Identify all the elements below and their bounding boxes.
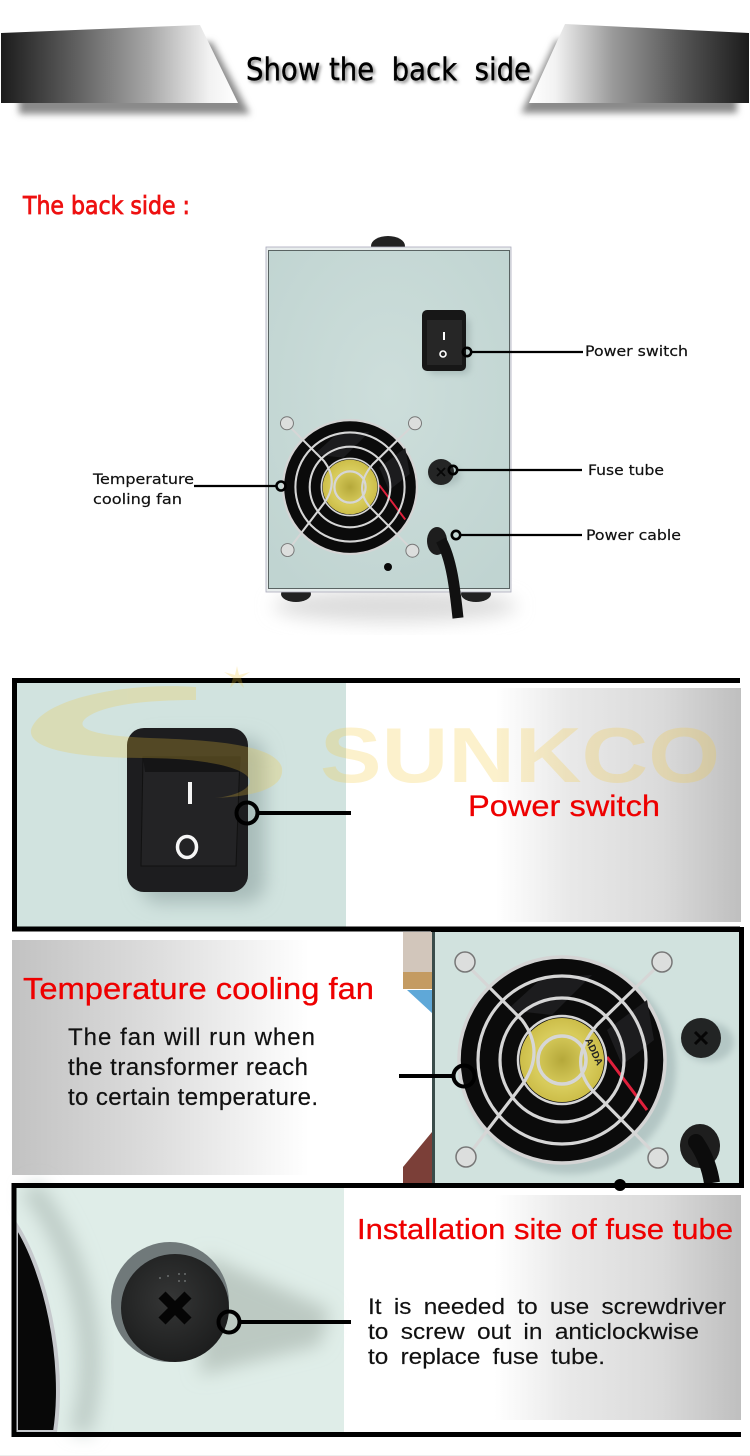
- page title: Show the back side: [246, 52, 531, 88]
- panel: power switch: [14, 666, 741, 929]
- fuse knob: [111, 1242, 229, 1362]
- gradient background: [12, 940, 403, 1175]
- callout pointer: [218, 1312, 351, 1332]
- callout: power cable: [452, 528, 681, 544]
- frame: [14, 1186, 744, 1434]
- heading: installation site of fuse tube: Installation site of fuse tube: [357, 1214, 733, 1246]
- power cable: [427, 527, 458, 618]
- fan photo: [432, 932, 739, 1191]
- fan label: ADDA: [582, 1037, 604, 1067]
- frame: [14, 680, 740, 929]
- vent hole: [614, 1179, 626, 1191]
- heading: power switch: Power switch: [468, 790, 660, 823]
- description text: It is needed to use screwdriver: [368, 1294, 726, 1319]
- callout: power cable: Power cable: [586, 528, 681, 544]
- description text: [368, 1294, 726, 1369]
- description text: The fan will run when: [68, 1024, 315, 1051]
- fuse holder: [681, 1018, 734, 1062]
- panel: fuse tube: [14, 1186, 744, 1434]
- panel: temperature cooling fan: [12, 930, 742, 1191]
- background photo strip: [403, 932, 432, 1183]
- small cooling fan: [280, 417, 422, 557]
- frame: [431, 930, 742, 1186]
- callout: power switch: Power switch: [585, 344, 688, 360]
- heading: temperature cooling fan: Temperature cooling fan: [23, 971, 374, 1006]
- gradient background: [346, 688, 741, 922]
- description text: the transformer reach: [68, 1054, 308, 1081]
- watermark: SUNKCO: [320, 711, 720, 799]
- callout: temperature cooling fan: Temperature: [92, 472, 194, 488]
- description text: to screw out in anticlockwise: [368, 1319, 699, 1344]
- watermark: [31, 666, 720, 799]
- section heading: the back side: The back side :: [22, 191, 190, 220]
- callout: fuse tube: [449, 463, 664, 479]
- right header ribbon: [521, 24, 749, 113]
- header banner: [1, 24, 749, 114]
- callout pointer: [236, 802, 351, 824]
- page title: Show the back side: [248, 54, 533, 90]
- description text: to certain temperature.: [68, 1084, 318, 1111]
- power switch: [422, 310, 470, 374]
- callout: fuse tube: Fuse tube: [588, 463, 664, 479]
- callout pointer: [399, 1066, 474, 1086]
- vent hole: [384, 563, 392, 571]
- switch photo: [17, 683, 346, 927]
- fuse tube holder: [428, 459, 461, 486]
- device photo: [266, 236, 517, 622]
- callout: temperature cooling fan: [92, 472, 286, 508]
- fuse photo: [16, 1188, 344, 1432]
- description text: [68, 1024, 318, 1111]
- power cable: [680, 1124, 720, 1183]
- description text: to replace fuse tube.: [368, 1344, 605, 1369]
- callout: power switch: [463, 344, 688, 360]
- callout: temperature cooling fan: cooling fan: [93, 492, 182, 508]
- left header ribbon: [1, 25, 250, 114]
- gradient background: [344, 1195, 741, 1420]
- device back view with callouts: [92, 236, 688, 622]
